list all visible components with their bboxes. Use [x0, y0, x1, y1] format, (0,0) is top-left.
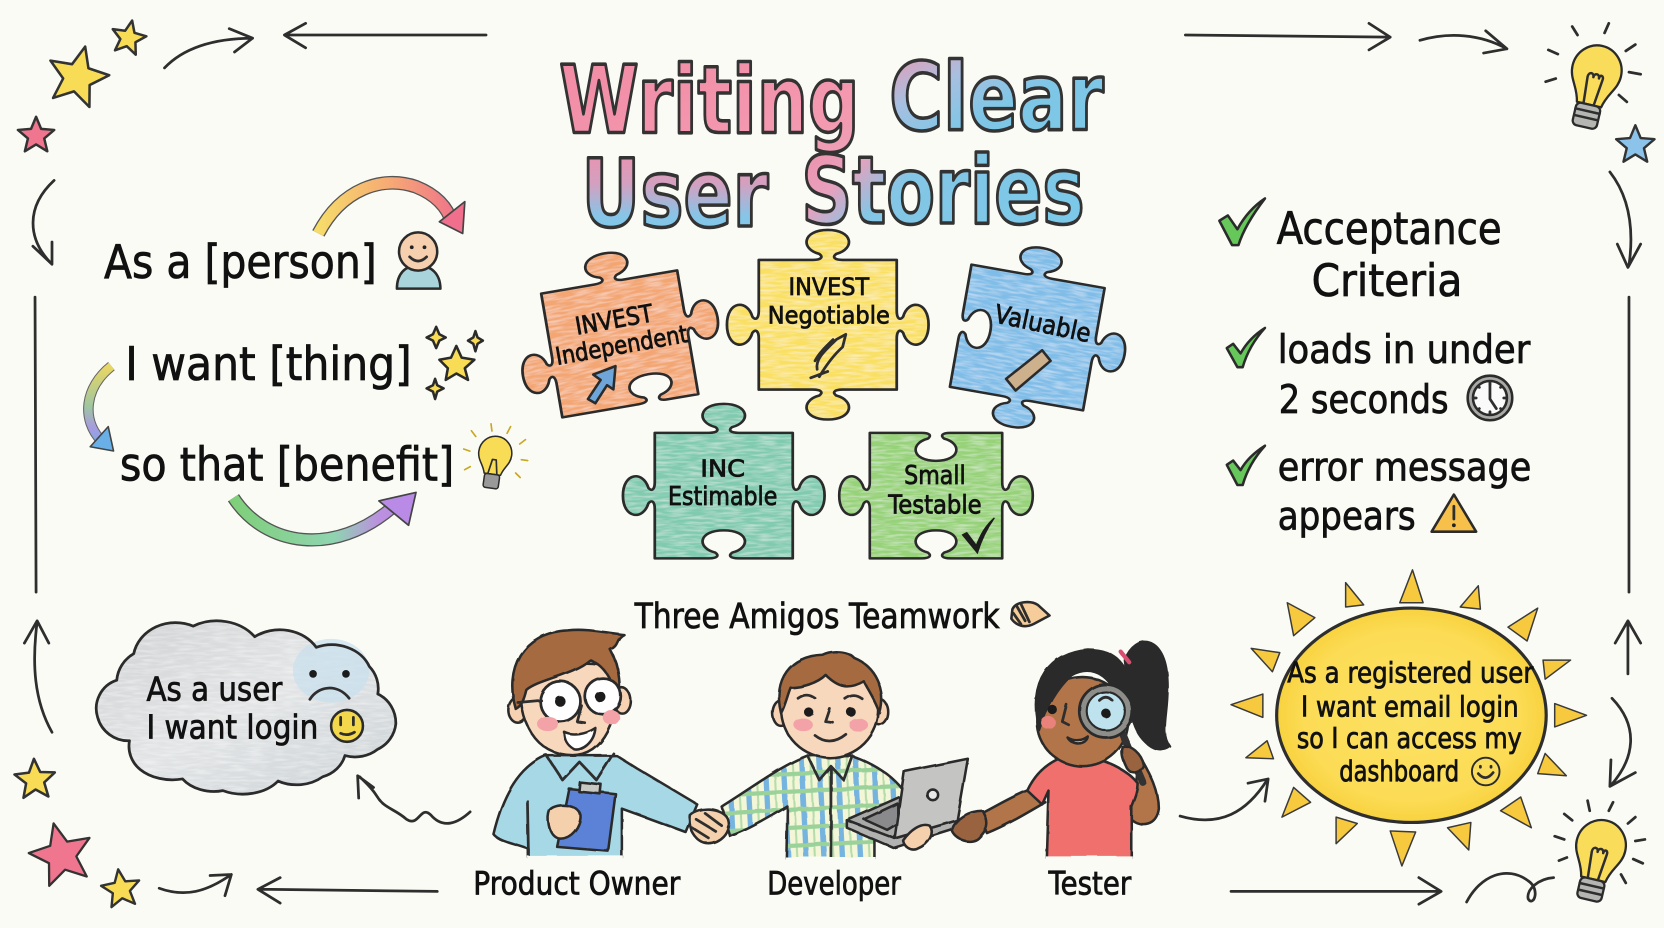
icon: check one — [1227, 328, 1265, 367]
arrow: to sun — [1180, 779, 1268, 820]
text: I want login: I want login — [146, 708, 318, 747]
arrow: left gradient — [88, 366, 114, 451]
text: 2 seconds: 2 seconds — [1279, 378, 1449, 423]
head — [773, 652, 888, 758]
icon: star with sparkles — [427, 327, 483, 399]
cloud shape — [96, 621, 396, 794]
heading: three amigos: Three Amigos Teamwork — [634, 596, 1000, 637]
puzzle: valuable blue: Valuable — [992, 300, 1094, 349]
puzzle: independent orange — [505, 236, 730, 423]
hand on magnifier — [1122, 747, 1144, 773]
icon: large check — [1219, 198, 1265, 245]
puzzle: negotiable yellow: Negotiable — [768, 301, 890, 330]
arrow: bottom right curly — [1467, 873, 1554, 902]
magnifying glass — [1079, 684, 1143, 782]
puzzle: small testable green: Small — [904, 461, 966, 491]
icon: light bulb small — [459, 421, 532, 493]
left hand — [952, 811, 987, 841]
arrow: right down curve — [1610, 172, 1641, 267]
arrow: bottom left line — [258, 878, 437, 903]
handshake — [690, 809, 729, 844]
title: Clear — [889, 43, 1104, 152]
arrow: squiggle to cloud — [358, 776, 470, 823]
puzzle: negotiable yellow: INVEST — [788, 272, 869, 301]
text: I want thing: I want [thing] — [125, 338, 412, 392]
sun disc — [1277, 608, 1546, 822]
character: tester — [952, 642, 1169, 859]
icon: light bulb bottom right — [1555, 801, 1645, 905]
text: appears: appears — [1278, 495, 1416, 540]
arrow: top left curve — [164, 29, 253, 68]
puzzle: independent orange: Independent — [553, 319, 690, 371]
icon: light bulb top right — [1546, 23, 1641, 133]
puzzle: small testable green — [839, 433, 1033, 558]
character: product owner — [493, 630, 697, 859]
arrow: left down curve — [33, 180, 54, 264]
icon: scribble arrows — [811, 334, 846, 378]
text: as a user: As a user — [146, 669, 283, 708]
arrow: green purple — [233, 492, 416, 540]
text: sun story: I want email login — [1301, 689, 1519, 723]
arrow: right up — [1615, 621, 1641, 674]
star: top pink — [18, 117, 54, 151]
character: developer — [690, 652, 968, 860]
star: bottom left pink — [23, 816, 98, 889]
shirt bottom fade — [527, 856, 623, 861]
text: so that benefit: so that [benefit] — [120, 439, 454, 493]
arrow: right lower curve — [1610, 698, 1635, 786]
arrow: left line — [35, 297, 36, 592]
text: error message: error message — [1278, 446, 1531, 491]
text: sun story: dashboard — [1339, 754, 1459, 788]
clipboard — [557, 782, 616, 851]
puzzle: estimable teal: Estimable — [668, 482, 777, 512]
star: bottom left yellow — [14, 758, 56, 798]
panel: vague cloud story — [96, 621, 396, 794]
puzzle: negotiable yellow — [727, 230, 929, 420]
title: Writing — [559, 47, 860, 156]
text: as a person: As a [person] — [104, 236, 377, 290]
text: acceptance: Acceptance — [1277, 203, 1502, 255]
hand holding clipboard — [548, 805, 581, 839]
label: developer: Developer — [767, 865, 902, 903]
panel: acceptance criteria — [1219, 198, 1531, 540]
puzzle: valuable blue — [945, 236, 1140, 444]
panel: INVEST puzzle pieces — [505, 230, 1140, 558]
icon: sad face — [309, 670, 350, 699]
text: loads in under: loads in under — [1278, 328, 1531, 373]
plaid shirt — [722, 756, 913, 859]
icon: pointing hand — [1011, 602, 1050, 626]
puzzle: estimable teal: INC — [700, 454, 745, 482]
icon: warning — [1432, 495, 1476, 532]
text: sun story: so I can access my — [1297, 721, 1522, 755]
arrow: left up curve — [24, 621, 52, 732]
label: product owner: Product Owner — [473, 865, 681, 903]
head — [508, 630, 630, 756]
panel: clear story sun — [1231, 570, 1587, 866]
puzzle: estimable teal — [623, 404, 825, 558]
laptop — [847, 759, 968, 848]
head — [1036, 649, 1131, 766]
shirt bottom fade — [1045, 856, 1132, 861]
text: sun story: As a registered user — [1287, 655, 1534, 689]
left arm — [978, 790, 1045, 833]
arrow: top right curve — [1420, 31, 1507, 53]
puzzle: small testable green: Testable — [887, 491, 982, 521]
title — [559, 43, 1104, 249]
star: bottom yellow — [99, 867, 142, 908]
labels: team roles — [473, 865, 1132, 903]
arrow: top left line — [284, 23, 486, 48]
arrow: top right line — [1185, 23, 1390, 50]
icon: check mark — [963, 518, 994, 553]
icon: blue arrow — [588, 366, 616, 403]
icon: check two — [1227, 446, 1265, 485]
text: sun story — [1287, 655, 1534, 788]
ponytail — [1125, 642, 1169, 749]
title: Stories — [801, 137, 1085, 246]
hand holding laptop — [903, 825, 932, 850]
sun rays — [1231, 570, 1587, 866]
arrow: right line — [1628, 297, 1630, 592]
text: criteria: Criteria — [1312, 255, 1462, 307]
title: User — [582, 140, 768, 249]
icon: stick — [1006, 350, 1051, 391]
arrow: rainbow — [318, 183, 465, 233]
shirt — [493, 756, 697, 857]
star: top small yellow — [109, 17, 149, 56]
panel: user story template — [88, 183, 532, 540]
star: top large yellow — [42, 39, 115, 110]
icon: smile — [1472, 758, 1500, 785]
red shirt — [1027, 758, 1138, 857]
shirt bottom fade — [785, 857, 876, 862]
icon: person — [397, 232, 440, 289]
arrow: bottom right line — [1231, 878, 1441, 904]
arrow: bottom left curve — [159, 874, 231, 896]
label: tester: Tester — [1048, 865, 1132, 903]
right arm — [1131, 760, 1159, 824]
icon: neutral emoji — [331, 710, 363, 742]
puzzle: independent orange: INVEST — [573, 298, 655, 341]
icon: clock — [1468, 376, 1512, 420]
star: top right blue — [1616, 125, 1655, 162]
